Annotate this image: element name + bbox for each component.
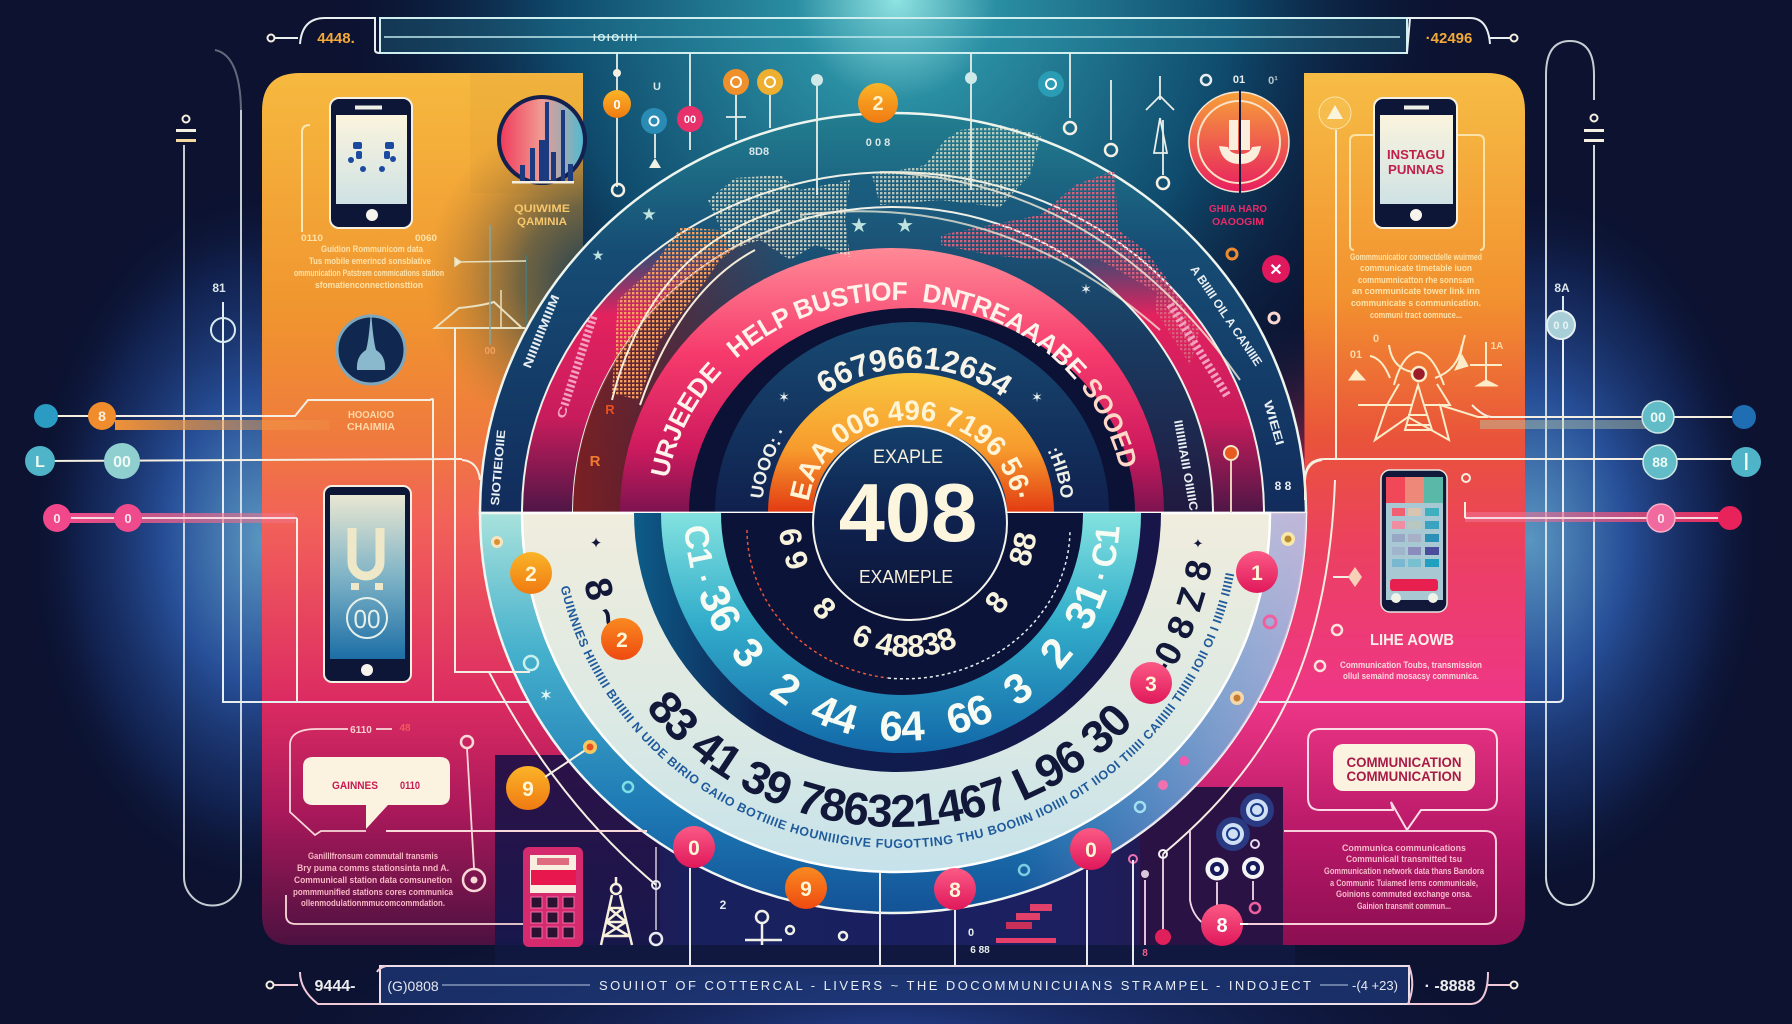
ring text: cyan band digits: 2	[1042, 639, 1074, 670]
phone: top right	[1374, 98, 1457, 228]
connector row 2: left	[25, 443, 462, 479]
text block: lower right description	[1324, 843, 1485, 911]
ring text: pale band small blue caption: GUINNIES HIIIIIIII BIIIIIII N UIDE BIRIO GAIIO BOTIIIIE HOUNIIIGIVE FUGOTTING THU BOOIIN IIOIIII OIT IIOOI TIIIII CAIIIIII TIIIIII IOII OI I IIIIII IIIIII	[561, 573, 1234, 848]
text block: lower left description: Ganilllfronsum commutall transmis	[308, 851, 438, 861]
callout frame: right	[1244, 831, 1496, 924]
ring text: upper pink band: HELP	[726, 308, 788, 358]
numbered badges on ring: 0	[1085, 839, 1097, 862]
centre hub	[813, 426, 1007, 620]
ring text: inner digits	[780, 529, 1036, 657]
stars: ★	[896, 215, 914, 237]
circular node: left capsule: 81	[212, 281, 226, 295]
medallion label: OAOOGIM	[1212, 217, 1264, 228]
text block: lower right description: Communica communications	[1342, 843, 1466, 853]
hub number: 408	[839, 466, 977, 559]
mast diagram: left	[435, 225, 526, 357]
icon: radio tower illustration: 01	[1350, 349, 1362, 361]
text block: top left description: sfomatienconnectionsttion	[315, 280, 423, 290]
ring text: cyan band digits: 3	[733, 638, 762, 666]
connector row 3: left: 0	[124, 511, 132, 526]
icon: left capsule marker	[176, 116, 196, 142]
footer bar	[266, 966, 1518, 1004]
stars: ✶	[1080, 281, 1092, 297]
stars: ★	[592, 247, 604, 263]
text block: top left description: 0110	[301, 233, 323, 243]
speech bubble: left: 0110	[400, 780, 420, 792]
text block: top left description	[294, 233, 444, 290]
connector row 3: left: 0	[53, 511, 61, 526]
ring text: inner digits: 6 48838	[854, 626, 956, 657]
medallion label	[1209, 204, 1267, 228]
ring text: upper pink band: BUSTIOF	[793, 282, 907, 320]
ring side labels	[488, 263, 1292, 512]
text block: top right description: commumnicatton rhe sonnsam	[1358, 275, 1474, 285]
stars: ★	[641, 205, 657, 224]
mast diagram: left: 00	[484, 346, 496, 357]
circular node: right capsule: 8A	[1554, 281, 1570, 295]
text block: top left description: ommunication Patstrem commications station	[294, 268, 444, 278]
icon: gauge	[337, 310, 405, 384]
top centre badges: 2	[872, 93, 884, 115]
connector row 2: left: 00	[113, 454, 131, 471]
icon: radio tower illustration: 0	[1373, 333, 1379, 345]
footer centre caption: SOUIIOT OF COTTERCAL - LIVERS ~ THE DOCOMMUNICUIANS STRAMPEL - INDOJECT	[599, 978, 1311, 993]
speech bubble: right	[1308, 729, 1497, 830]
connector: badge nine	[545, 740, 597, 777]
small markers on ring: ✶	[540, 687, 552, 703]
numbered badges on ring: 2	[525, 563, 537, 586]
small markers: top right: 01	[1233, 74, 1245, 86]
vertical lines: top centre	[617, 53, 1174, 195]
ring text: inner digits: 88	[1010, 532, 1036, 566]
text block: lower right description: Gainion transmit commun...	[1357, 901, 1451, 911]
connector row 1: left: 8	[98, 408, 106, 424]
ring text: navy band numbers: 66796612654	[818, 346, 1012, 396]
small markers on ring: ✦	[1193, 536, 1204, 551]
panel: right column	[1140, 73, 1525, 945]
numbered badges on ring	[506, 551, 1278, 910]
ring text: pale band right digits: -0 8 Z 8	[1156, 560, 1211, 668]
small markers: top right: 0¹	[1268, 75, 1278, 87]
text block: lower left description: Communicall station data comsunetion	[294, 875, 452, 885]
hub bottom label: EXAMEPLE	[859, 567, 953, 587]
icons: bottom centre	[720, 898, 1056, 956]
callout frame: left: 6110	[350, 725, 372, 736]
footer left code: (G)0808	[387, 978, 439, 994]
circular node: right capsule: 0 0	[1553, 320, 1569, 332]
ring text: cyan band digits: C1	[1092, 526, 1120, 566]
ring text: pale band digits: 83 41 39 786321467 L96 30	[650, 692, 1129, 828]
connector row 2: left: L	[35, 454, 45, 471]
connector row 2: right: 88	[1652, 454, 1668, 470]
ring side labels: NIIIIIIIMIIIM	[520, 293, 562, 370]
small markers: top right	[1201, 74, 1290, 513]
arcs over map	[612, 172, 1240, 405]
ring text: upper pink band: URJEEDE	[650, 361, 722, 476]
heading: right mid label: LIHE AOWB	[1370, 632, 1454, 649]
icon: triangle marker	[1319, 97, 1351, 460]
ring side labels: SIOTIEIOIIE	[488, 429, 508, 506]
connector: tower line	[650, 847, 1133, 966]
node cluster: bottom right: 8	[1142, 948, 1148, 959]
text block: top right description: Gommmunicatior connectdelle wuirmed	[1350, 252, 1482, 262]
header left number: 4448.	[317, 30, 355, 47]
ring text: cyan band digits: 64	[881, 711, 925, 741]
ring glyphs: left maroon band	[590, 402, 615, 470]
connector row 2: right	[1305, 445, 1761, 500]
ring text: upper pink band: SOOED	[1082, 379, 1136, 466]
phone screen text: INSTAGU	[1387, 147, 1445, 162]
icon: calculator	[523, 847, 583, 947]
side capsule: left	[184, 50, 530, 906]
connector row 3: right	[1465, 504, 1742, 532]
text block: top left description: Guidion Rommunicom data	[321, 244, 424, 254]
top centre badges	[603, 69, 1169, 196]
gauge label	[347, 410, 395, 433]
text block: lower left description: pommmunified stations cores communica	[293, 887, 454, 897]
callout frame: left: 48	[399, 723, 411, 734]
ring text: navy band left: UOOO: ·	[750, 430, 782, 498]
ring text: cyan band digits: 2	[769, 674, 800, 706]
connector row 1: right	[1472, 401, 1756, 433]
header right number: ·42496	[1426, 30, 1472, 47]
ring glyphs: left maroon band: R	[605, 402, 615, 417]
phone: mid right	[1381, 470, 1447, 612]
text block: lower right description: Communicall transmitted tsu	[1346, 854, 1462, 864]
connector row 1: left	[34, 402, 330, 430]
top centre badges: U	[653, 81, 661, 93]
ring side labels: CIIIIIIIIIIIIIIIIIIII	[554, 313, 601, 420]
panel: bottom centre band	[495, 755, 1295, 975]
stars	[592, 205, 1092, 405]
icon: plug medallion	[1189, 90, 1289, 193]
text block: top right description: communicate timetable iuon	[1360, 263, 1472, 273]
stars: ✶	[1031, 389, 1043, 405]
bracket: phone top left	[302, 125, 310, 232]
ring text: cyan band digits: C1	[685, 526, 712, 568]
node cluster: bottom right	[1129, 780, 1274, 960]
ring small labels: top: 0 0 8	[866, 137, 890, 149]
dial label: QUIWIME	[514, 203, 570, 215]
ring text: cyan band digits: 66	[948, 696, 992, 733]
ring text: yellow band: EAA 006 496 7196 56·	[790, 400, 1028, 500]
ring text: cyan band digits: 3	[1004, 674, 1032, 704]
phone: mid left: 00	[354, 604, 380, 634]
text block: lower left description: Bry puma comms stationsinta nnd A.	[297, 863, 449, 873]
phone screen text	[1387, 147, 1445, 177]
numbered badges on ring: 1	[1251, 562, 1263, 585]
map: dotted continents	[612, 125, 1200, 400]
dial label	[514, 203, 570, 228]
phone: mid left	[324, 486, 411, 682]
header centre label: IOIOIIII	[593, 33, 637, 44]
header bar	[268, 18, 1518, 53]
text block: top right description: communicate s communication.	[1351, 298, 1481, 308]
icon: radio tower illustration	[1349, 333, 1503, 440]
ring side labels: IIIIIIIIIIIIIIIIIIII	[1163, 300, 1233, 400]
icons: bottom centre: 2	[720, 898, 727, 912]
ring text: cyan band digits: 36	[700, 586, 740, 631]
ring text: inner digits: 8	[814, 598, 835, 619]
ring side labels: A BIIIII OIL A CANIIIE	[1188, 263, 1265, 369]
ring text: pale band left digits: 8 ~	[585, 578, 612, 624]
side capsule: right	[1259, 41, 1594, 905]
panel: left column	[262, 73, 700, 945]
markers: right mid	[1315, 474, 1470, 671]
gauge label: CHAIMIIA	[347, 422, 395, 433]
ring small labels: top: 8D8	[749, 146, 769, 158]
ring side labels: WIEEI	[1261, 399, 1287, 447]
rings: upper half	[480, 113, 1306, 513]
connector row 1: right: 00	[1650, 409, 1666, 425]
ring text: navy band right: :HIBO	[1048, 448, 1073, 498]
text block: right mid description: Communication Toubs, transmission	[1340, 660, 1482, 670]
small markers on ring	[491, 532, 1295, 875]
speech bubble: left	[303, 757, 450, 829]
ring text: cyan band digits: ·	[1098, 574, 1104, 580]
ring small labels: top	[749, 137, 890, 158]
text block: right mid description: ollul semaind mosacsy communica.	[1343, 671, 1479, 681]
numbered badges on ring: 9	[522, 778, 534, 801]
ring text: upper pink band: DN	[923, 284, 960, 308]
top centre badges: 00	[684, 114, 696, 126]
text block: lower right description: Goinions commuted exchange onsa.	[1336, 889, 1472, 899]
ring text: cyan band digits: ·	[700, 576, 706, 581]
phone: top left	[330, 98, 412, 228]
speech bubble: left: GAINNES	[332, 780, 378, 792]
text block: top left description: 0060	[415, 233, 437, 243]
ring text: cyan band digits: 44	[811, 698, 857, 734]
numbered badges on ring: 9	[800, 878, 812, 901]
numbered badges on ring: 2	[616, 629, 628, 652]
small markers on ring: ✦	[590, 535, 602, 552]
text block: right mid description	[1340, 660, 1482, 681]
icons: bottom centre: 0	[968, 927, 974, 939]
ring text: upper pink band: TREAAABE	[960, 290, 1088, 380]
medallion label: GHIIA HARO	[1209, 204, 1267, 215]
ring glyphs: left maroon band: R	[590, 453, 601, 470]
dial label: QAMINIA	[517, 216, 567, 228]
numbered badges on ring: 3	[1145, 673, 1157, 696]
gauge label: HOOAIOO	[348, 410, 394, 421]
text block: top left description: Tus mobile emerincd sonsblative	[309, 256, 431, 266]
ring side labels: 8 8	[1275, 479, 1292, 493]
text block: lower right description: Gommunication network data thans Bandora	[1324, 866, 1485, 876]
icons: bottom centre: 6 88	[970, 945, 990, 956]
text block: lower right description: a Communic Tuiamed lerns communicale,	[1330, 878, 1478, 888]
icon: skyline dial	[499, 97, 585, 184]
bracket: phone top right	[1350, 135, 1484, 250]
extra arcs: outer connectors	[115, 328, 1350, 885]
ring side labels: IIIIIIIIAIII OIIIIIC	[1171, 419, 1201, 512]
connector row 3: left	[43, 504, 297, 532]
ring text: inner digits: 8	[986, 592, 1008, 613]
dashed arcs	[747, 530, 1070, 679]
circular node: left capsule	[211, 281, 235, 342]
text block: lower left description: ollenmodulationmmucomcommdation.	[301, 898, 445, 908]
circular node: right capsule	[1547, 281, 1575, 339]
ring text: inner digits: 6 9	[780, 529, 808, 568]
text block: lower left description	[293, 851, 454, 908]
footer left number: 9444-	[315, 978, 355, 995]
text block: top right description	[1350, 252, 1482, 320]
speech bubble: right: COMMUNICATION	[1346, 754, 1462, 770]
footer right number: · -8888	[1425, 978, 1475, 995]
ring text: upper pink band	[650, 282, 1136, 476]
speech bubble: right: COMMUNICATION	[1346, 768, 1462, 784]
ring text: cyan band digits	[685, 526, 1120, 741]
connector row 3: right: 0	[1657, 511, 1665, 526]
text block: top right description: an communicate tower link inn	[1352, 286, 1480, 296]
footer right code: -(4 +23)	[1352, 978, 1398, 993]
text block: top right description: communi tract oomnuce...	[1370, 310, 1462, 320]
icon: right capsule marker	[1584, 114, 1604, 142]
icon: transmission tower	[601, 877, 632, 945]
rings: lower half	[480, 513, 1306, 913]
phone screen text: PUNNAS	[1388, 162, 1444, 177]
node cluster: bottom right: 8	[1216, 915, 1228, 937]
callout frame: left	[286, 723, 647, 924]
numbered badges on ring: 8	[949, 879, 961, 902]
icon: phone dots	[348, 142, 396, 172]
ring text: cyan band digits: 31	[1066, 586, 1108, 629]
small markers: top right: ✕	[1269, 262, 1283, 279]
stars: ✶	[778, 389, 790, 405]
top centre badges: 0	[613, 97, 621, 112]
colour swatch grid	[1386, 477, 1443, 567]
numbered badges on ring: 0	[688, 837, 700, 860]
stars: ★	[850, 215, 868, 237]
hub top label: EXAPLE	[873, 447, 943, 468]
icon: radio tower illustration: 1A	[1491, 341, 1503, 352]
